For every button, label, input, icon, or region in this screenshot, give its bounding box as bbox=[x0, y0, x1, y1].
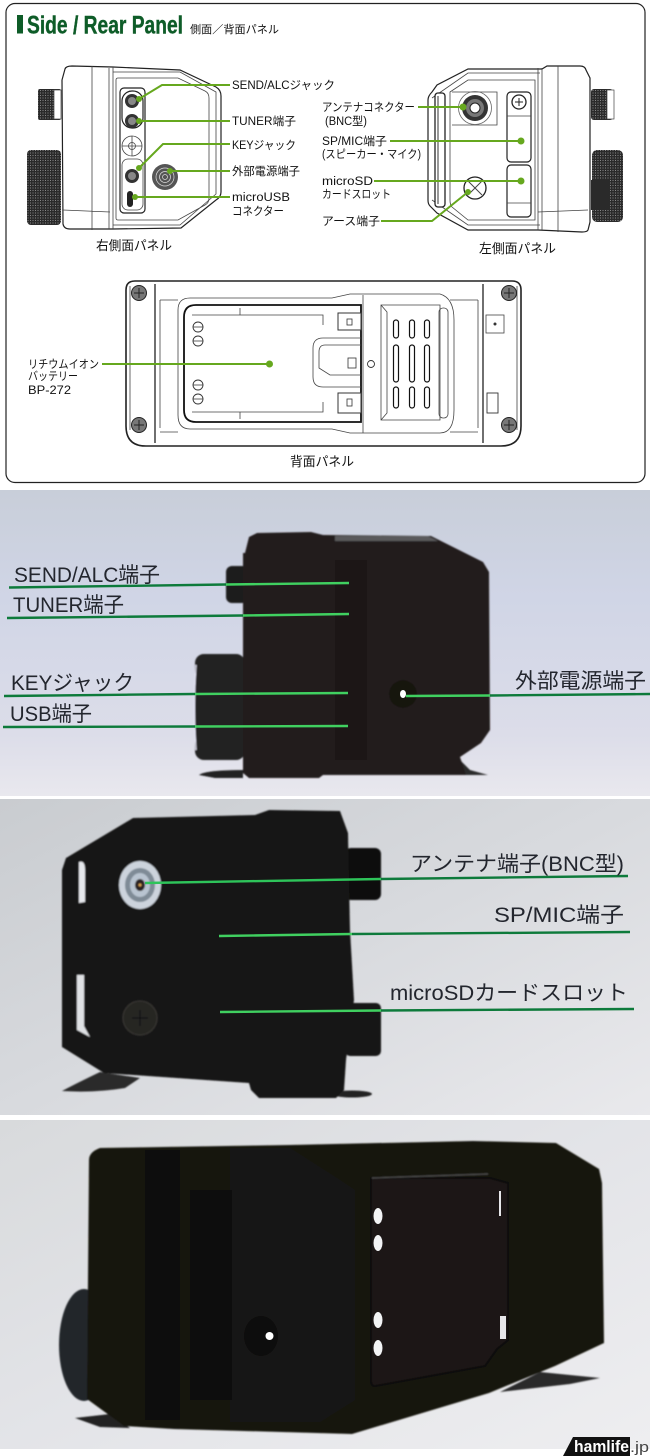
diagram: right side panel bbox=[27, 66, 221, 230]
labels: right side panel: KEYジャック bbox=[232, 139, 296, 152]
title: Side / Rear Panel bbox=[27, 12, 183, 40]
photo labels: KEYジャック bbox=[11, 672, 134, 695]
photo: left side with labelled ports bbox=[0, 799, 650, 1115]
photo: rear view bbox=[0, 1120, 650, 1449]
labels: left side panel: (スピーカー・マイク) bbox=[322, 148, 421, 161]
photo labels: USB端子 bbox=[10, 703, 92, 726]
callout lines: right side panel bbox=[132, 85, 230, 200]
diagram: left side panel bbox=[428, 66, 623, 232]
caption: right side panel: 右側面パネル bbox=[96, 238, 172, 253]
labels: left side panel: SP/MIC端子 bbox=[322, 134, 387, 148]
green laser lines bbox=[145, 876, 634, 1012]
photo labels bbox=[10, 564, 646, 726]
labels: right side panel: コネクター bbox=[232, 205, 284, 218]
labels: right side panel: TUNER端子 bbox=[232, 114, 296, 128]
labels: left side panel: microSD bbox=[322, 176, 373, 188]
photo labels: TUNER端子 bbox=[13, 594, 124, 617]
logo: hamlife.jp bbox=[563, 1437, 649, 1456]
labels: right side panel: 外部電源端子 bbox=[232, 164, 300, 178]
callout: battery: バッテリー bbox=[28, 370, 78, 383]
labels: right side panel: microUSB bbox=[232, 192, 290, 204]
diagram: rear panel bbox=[126, 281, 521, 446]
panel: side and rear diagrams bbox=[6, 4, 645, 482]
callout: battery bbox=[28, 358, 273, 397]
labels: left side panel: アース端子 bbox=[322, 214, 380, 228]
title: 側面／背面パネル bbox=[190, 22, 279, 36]
labels: left side panel bbox=[322, 101, 421, 228]
photo: right side with labelled ports bbox=[0, 490, 650, 796]
logo: hamlife.jp: .jp bbox=[630, 1439, 649, 1456]
photo labels: microSDカードスロット bbox=[390, 982, 628, 1005]
labels: right side panel: SEND/ALCジャック bbox=[232, 79, 335, 92]
device silhouette bbox=[62, 810, 381, 1098]
photo labels: 外部電源端子 bbox=[515, 670, 646, 693]
labels: left side panel: カードスロット bbox=[322, 188, 391, 201]
photo labels: SEND/ALC端子 bbox=[14, 564, 160, 587]
photo labels bbox=[390, 853, 628, 1005]
caption: rear panel: 背面パネル bbox=[290, 454, 354, 469]
logo: hamlife.jp: hamlife bbox=[574, 1438, 629, 1456]
callout: battery: BP-272 bbox=[28, 385, 71, 397]
labels: left side panel: アンテナコネクター bbox=[322, 101, 415, 114]
labels: right side panel bbox=[232, 79, 335, 218]
caption: left side panel: 左側面パネル bbox=[479, 241, 556, 256]
device silhouette bbox=[194, 532, 490, 778]
callout lines: left side panel bbox=[374, 104, 524, 221]
device silhouette bbox=[59, 1141, 604, 1434]
callout: battery: リチウムイオン bbox=[28, 358, 99, 371]
labels: left side panel: (BNC型) bbox=[325, 114, 367, 128]
photo labels: SP/MIC端子 bbox=[494, 904, 624, 927]
green laser lines bbox=[3, 583, 650, 727]
photo labels: アンテナ端子(BNC型) bbox=[410, 853, 624, 876]
